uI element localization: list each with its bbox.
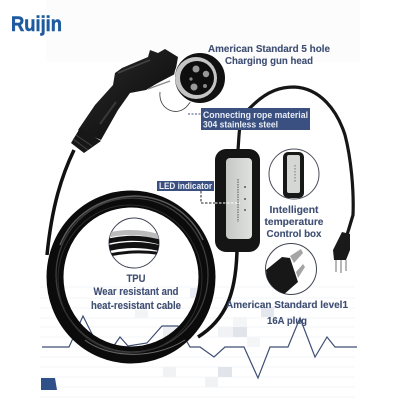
control box — [215, 149, 260, 252]
cable from gun to coil — [47, 150, 74, 255]
text: control box: Control box — [266, 228, 322, 240]
charging gun — [71, 49, 178, 153]
text: control box — [264, 204, 324, 240]
icon: gun head circle — [174, 52, 226, 104]
heading: gun head: American Standard 5 hole — [208, 43, 330, 55]
thin callout circle — [160, 92, 192, 111]
cable coil — [55, 196, 208, 355]
text: plug — [226, 299, 348, 327]
heading: gun head — [208, 43, 330, 67]
cable from control box to coil — [198, 250, 237, 337]
label: connecting rope: Connecting rope material — [203, 110, 308, 121]
power cable — [238, 87, 353, 235]
decorative blue square — [41, 378, 57, 390]
text: TPU cable: heat-resistant cable — [91, 300, 181, 312]
text: TPU cable: Wear resistant and — [94, 286, 178, 298]
icon: plug circle — [266, 244, 316, 296]
label: connecting rope: 304 stainless steel — [203, 120, 278, 130]
heartbeat line — [42, 316, 357, 378]
label: connecting rope — [188, 108, 310, 130]
text: TPU cable: TPU — [126, 273, 146, 285]
icon: plug — [333, 232, 350, 273]
text: TPU cable — [91, 273, 181, 312]
icon: TPU cable circle — [108, 218, 160, 268]
icon: control box circle — [269, 149, 319, 199]
logo: Ruijin — [11, 13, 62, 36]
heading: gun head: Charging gun head — [225, 55, 313, 67]
text: control box: Intelligent — [270, 204, 319, 216]
text: plug: American Standard level1 — [226, 299, 348, 311]
label: LED indicator: LED indicator — [159, 180, 212, 191]
text: control box: temperature — [264, 216, 324, 228]
text: plug: 16A plug — [267, 315, 307, 327]
label: LED indicator — [157, 180, 240, 203]
